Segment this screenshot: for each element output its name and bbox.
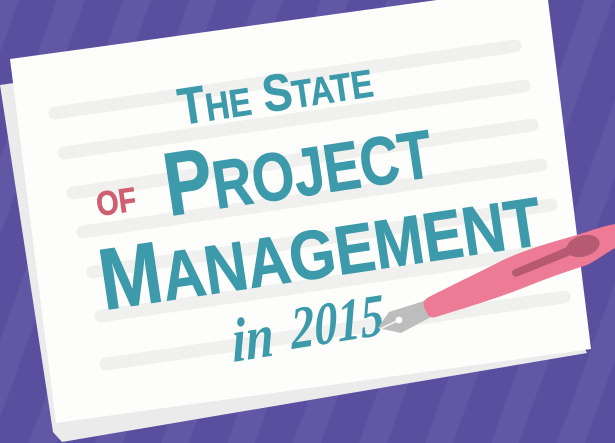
title: in 2015: 2015 <box>288 281 386 363</box>
title: in 2015 <box>230 281 386 376</box>
icon: fountain pen <box>378 224 615 333</box>
title: Management: MANAGEMENT <box>92 167 547 329</box>
title: in 2015: in <box>230 301 275 376</box>
title: Project: PROJECT <box>157 97 438 236</box>
title: of: OF <box>94 181 139 224</box>
back sheet of paper edge <box>0 83 587 442</box>
pen slot <box>512 231 602 277</box>
ruled lines on paper <box>55 46 564 364</box>
pen nib <box>378 301 431 333</box>
pen body <box>423 224 615 318</box>
title: The State: THE STATE <box>174 51 377 137</box>
